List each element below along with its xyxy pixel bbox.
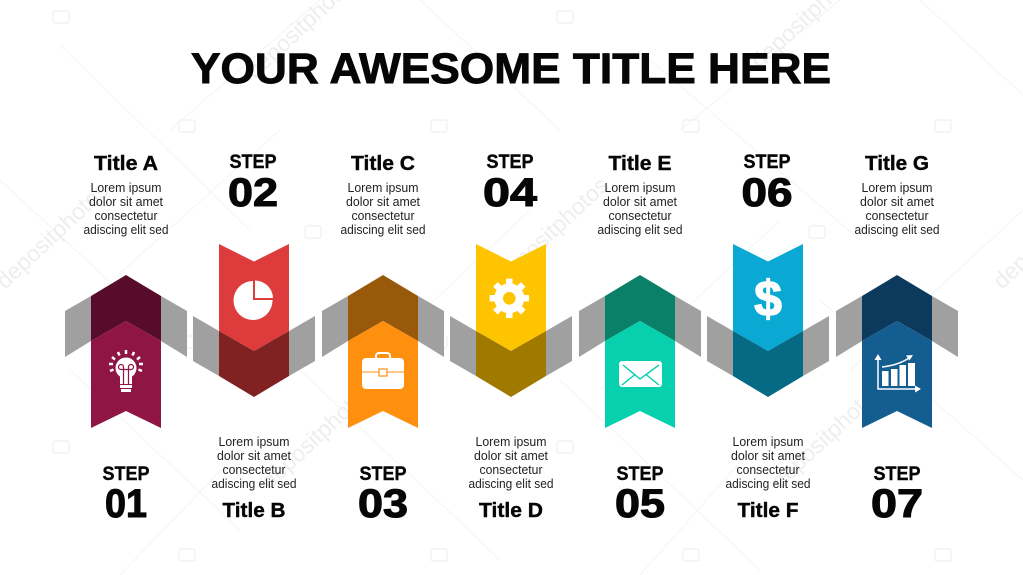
step 02 ribbon: [193, 244, 315, 397]
icon: pie chart: [234, 280, 273, 320]
text block: title F: consectetur: [736, 462, 800, 477]
step 04 ribbon: [450, 244, 572, 397]
label: step 04: [483, 152, 538, 215]
label: step 02: 02: [228, 171, 278, 215]
label: step 03: 03: [358, 482, 408, 526]
text block: title D: dolor sit amet: [474, 448, 548, 463]
step 07 ribbon: [836, 275, 958, 428]
icon: envelope: [619, 361, 662, 387]
label: step 03: STEP: [360, 464, 407, 485]
text block: title A: adiscing elit sed: [84, 222, 168, 237]
text block: title B: consectetur: [222, 462, 286, 477]
step 05 ribbon: [579, 275, 701, 428]
step 06 ribbon: [707, 244, 829, 397]
text block: title G: adiscing elit sed: [854, 222, 940, 237]
label: step 01: 01: [105, 482, 147, 526]
text block: title C: consectetur: [352, 208, 415, 223]
text block: title G: Lorem ipsum: [862, 180, 932, 195]
text block: title D: consectetur: [480, 462, 543, 477]
text block: title B: Lorem ipsum: [218, 434, 290, 449]
label: step 06: STEP: [744, 152, 791, 173]
label: step 05: STEP: [616, 464, 664, 485]
text block: title B: adiscing elit sed: [212, 476, 296, 491]
label: step 07: [871, 464, 923, 526]
title: YOUR AWESOME TITLE HERE: [191, 45, 831, 93]
label: step 05: [615, 464, 665, 526]
text: depositphotos: [256, 377, 378, 494]
text block: title E: dolor sit amet: [603, 194, 677, 209]
text block: title G: consectetur: [866, 208, 929, 223]
text block: title D: [468, 434, 554, 522]
text block: title A: dolor sit amet: [89, 194, 163, 209]
text block: title E: adiscing elit sed: [598, 222, 682, 237]
text block: title E: consectetur: [608, 208, 672, 223]
text block: title A: Lorem ipsum: [90, 180, 162, 195]
label: step 07: 07: [871, 482, 923, 526]
text block: title C: [340, 153, 426, 237]
text block: title F: Lorem ipsum: [732, 434, 804, 449]
text: depositphotos: [766, 377, 888, 494]
label: step 07: STEP: [874, 464, 921, 485]
text block: title G: dolor sit amet: [860, 194, 934, 209]
text block: title F: adiscing elit sed: [726, 476, 810, 491]
icon: briefcase: [362, 353, 404, 389]
text block: title F: dolor sit amet: [731, 448, 805, 463]
text block: title A: [84, 153, 168, 237]
label: step 04: 04: [483, 171, 538, 215]
text block: title B: dolor sit amet: [217, 448, 291, 463]
text block: title D: Title D: [479, 500, 543, 522]
text block: title G: Title G: [865, 153, 929, 175]
text block: title C: Title C: [351, 153, 415, 175]
text block: title E: Lorem ipsum: [604, 180, 676, 195]
text block: title A: Title A: [94, 153, 158, 175]
label: step 01: STEP: [102, 464, 150, 485]
text block: title D: adiscing elit sed: [468, 476, 554, 491]
label: step 06: [742, 152, 792, 215]
step 01 ribbon: [65, 275, 187, 428]
label: step 01: [102, 464, 150, 526]
icon: dollar sign: $: [754, 271, 782, 327]
text block: title G: [854, 153, 940, 237]
label: step 04: STEP: [486, 152, 534, 173]
text block: title E: Title E: [608, 153, 672, 175]
label: step 03: [358, 464, 408, 526]
label: step 06: 06: [742, 171, 792, 215]
text block: title F: Title F: [738, 500, 798, 522]
label: step 05: 05: [615, 482, 665, 526]
text block: title C: Lorem ipsum: [348, 180, 418, 195]
text: depositphotos: [491, 172, 613, 289]
label: step 02: [228, 152, 278, 215]
text block: title B: Title B: [222, 500, 286, 522]
text block: title C: dolor sit amet: [346, 194, 420, 209]
text block: title A: consectetur: [94, 208, 158, 223]
text block: title B: [212, 434, 296, 522]
step 03 ribbon: [322, 275, 444, 428]
text block: title D: Lorem ipsum: [476, 434, 546, 449]
text block: title C: adiscing elit sed: [340, 222, 426, 237]
icon: growth chart: [874, 354, 921, 392]
text block: title E: [598, 153, 682, 237]
icon: gear: [490, 279, 529, 318]
label: step 02: STEP: [230, 152, 277, 173]
icon: light bulb: [109, 350, 143, 392]
text block: title F: [726, 434, 810, 522]
